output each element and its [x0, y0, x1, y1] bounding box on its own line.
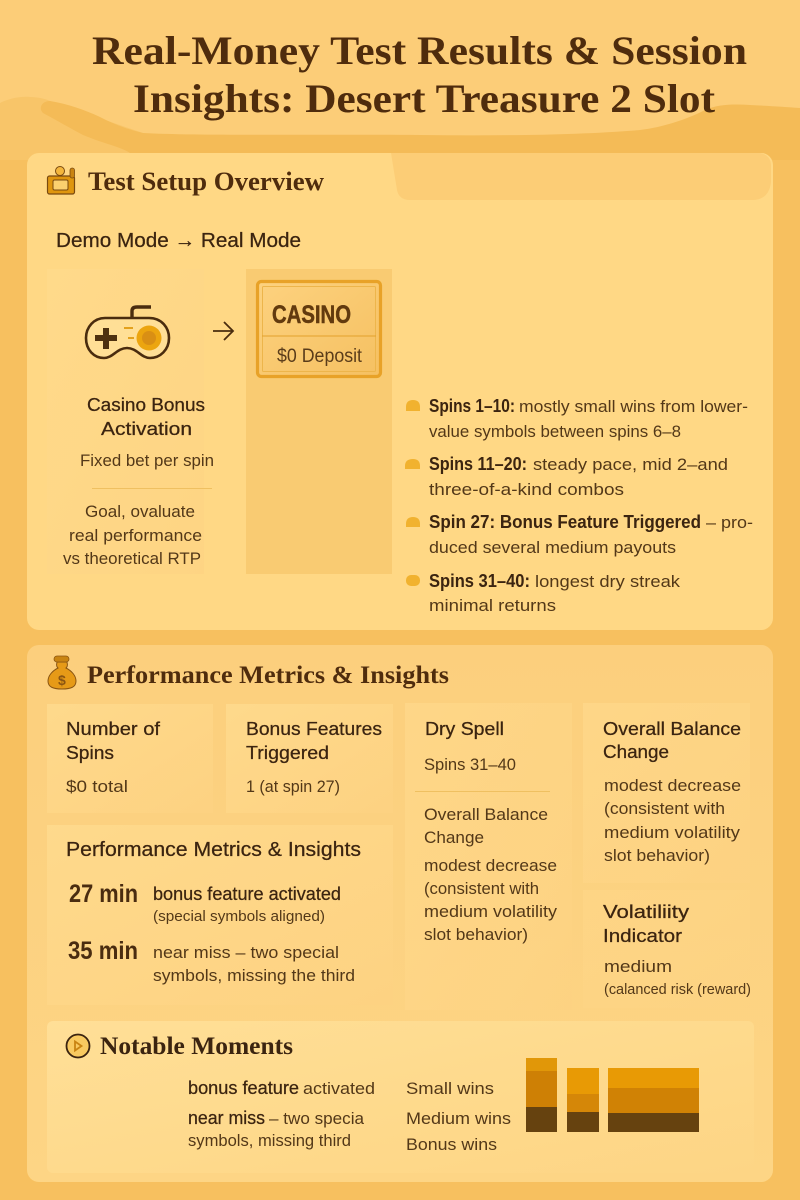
title: [92, 28, 747, 121]
text: moments: symbols, missing third: [188, 1131, 351, 1150]
icon: play circle: [66, 1034, 90, 1058]
card: dry spell: (consistent with: [424, 879, 539, 898]
card: session timings: bonus feature activated: [153, 884, 341, 904]
card: number of spins: [47, 704, 213, 813]
title: Insights: Desert Treasure 2 Slot: [133, 76, 716, 121]
text: moments: bonus feature: [188, 1078, 299, 1098]
panel: bonus activation: [47, 269, 214, 574]
item: spin 27: duced several medium payouts: [429, 538, 676, 557]
panel: casino column: [246, 269, 392, 574]
casino deposit card: CASINO: [272, 301, 351, 329]
text: goal: Goal, ovaluate: [85, 502, 195, 521]
card: volatility indicator: Volatiliity: [603, 902, 689, 922]
heading: performance metrics: Performance Metrics & Insights: [87, 662, 449, 689]
item: spins 1-10: mostly small wins from lower-: [519, 397, 748, 416]
card: session timings: symbols, missing the third: [153, 966, 355, 985]
card: dry spell: Overall Balance: [424, 805, 548, 824]
item: spin 27: – pro-: [706, 513, 753, 532]
arrow: [213, 322, 233, 340]
panel: performance metrics: [27, 645, 773, 1182]
legend: [406, 1079, 511, 1154]
card: dry spell: Spins 31–40: [424, 755, 516, 774]
desert dunes: [0, 97, 800, 160]
casino deposit card: $0 Deposit: [277, 346, 363, 367]
card: session timings: Performance Metrics & Insights: [66, 839, 361, 861]
icon: money bag: $: [58, 672, 66, 688]
card: number of spins: Number of: [66, 719, 161, 739]
card: number of spins: $0 total: [66, 777, 128, 796]
card: overall balance change: (consistent with: [604, 799, 725, 818]
text: moments: near miss: [188, 1108, 265, 1128]
item: spin 27: [406, 512, 753, 557]
text: moments: [188, 1078, 375, 1150]
card: dry spell: slot behavior): [424, 925, 528, 944]
card: session timings: 27 min: [69, 880, 138, 908]
panel: notable moments: [47, 1021, 754, 1173]
item: spins 1-10: [406, 396, 748, 441]
legend: Medium wins: [406, 1109, 511, 1128]
text: moments: – two specia: [269, 1109, 365, 1128]
icon: camera case: [48, 166, 74, 194]
card: bonus features: [226, 704, 393, 813]
legend: Small wins: [406, 1079, 494, 1098]
card: volatility indicator: (calanced risk (reward): [604, 981, 751, 998]
item: spins 31-40: Spins 31–40:: [429, 571, 530, 591]
text: moments: activated: [303, 1079, 375, 1098]
card: dry spell: modest decrease: [424, 856, 557, 875]
heading: notable moments: Notable Moments: [100, 1033, 293, 1060]
heading: test setup overview: Test Setup Overview: [88, 167, 324, 196]
card: overall balance change: modest decrease: [604, 776, 741, 795]
item: spins 11-20: Spins 11–20:: [429, 454, 527, 474]
legend: Bonus wins: [406, 1135, 497, 1154]
text: goal: vs theoretical RTP: [63, 549, 201, 568]
card: dry spell: [405, 703, 572, 1010]
casino deposit card: [258, 282, 380, 376]
card: dry spell: Change: [424, 828, 484, 847]
card: session timings: [47, 825, 393, 1005]
text: casino bonus activation: Casino Bonus: [87, 395, 205, 415]
item: spins 1-10: Spins 1–10:: [429, 396, 515, 416]
spin timeline list: [405, 396, 753, 615]
text: fixed bet: Fixed bet per spin: [80, 451, 214, 470]
card: overall balance change: Change: [603, 742, 669, 762]
text: goal: [63, 502, 202, 568]
card: volatility indicator: Indicator: [603, 926, 682, 946]
icon: game controller: [86, 307, 169, 358]
card: overall balance change: slot behavior): [604, 846, 710, 865]
card: bonus features: Bonus Features: [246, 719, 382, 739]
item: spin 27: Spin 27: Bonus Feature Triggered: [429, 512, 701, 532]
item: spins 11-20: steady pace, mid 2–and: [533, 455, 728, 474]
card: overall balance change: medium volatility: [604, 823, 741, 842]
card: volatility indicator: medium: [604, 957, 672, 976]
card: overall balance change: [583, 703, 750, 883]
card: volatility indicator: [583, 890, 751, 1008]
item: spins 31-40: longest dry streak: [535, 572, 681, 591]
item: spins 31-40: [406, 571, 681, 615]
card: bonus features: Triggered: [246, 743, 329, 763]
card: overall balance change: Overall Balance: [603, 719, 741, 739]
item: spins 1-10: value symbols between spins 6–8: [429, 422, 681, 441]
item: spins 11-20: three-of-a-kind combos: [429, 480, 624, 499]
subheading: demo to real: Demo Mode → Real Mode: [56, 230, 301, 252]
card: session timings: 35 min: [68, 937, 138, 965]
text: goal: real performance: [69, 526, 202, 545]
panel: test setup overview: [27, 153, 773, 630]
panel: bonus activation: Activation: [101, 419, 192, 439]
card: dry spell: Dry Spell: [425, 719, 504, 739]
card: session timings: (special symbols aligned): [153, 908, 325, 925]
card: bonus features: 1 (at spin 27): [246, 777, 340, 796]
card: session timings: near miss – two special: [153, 943, 339, 962]
card: number of spins: Spins: [66, 743, 114, 763]
bar chart: [526, 1058, 699, 1132]
icon: money bag: [48, 656, 76, 689]
item: spins 11-20: [405, 454, 728, 499]
title: Real-Money Test Results & Session: [92, 28, 747, 73]
item: spins 31-40: minimal returns: [429, 596, 556, 615]
card: dry spell: medium volatility: [424, 902, 558, 921]
